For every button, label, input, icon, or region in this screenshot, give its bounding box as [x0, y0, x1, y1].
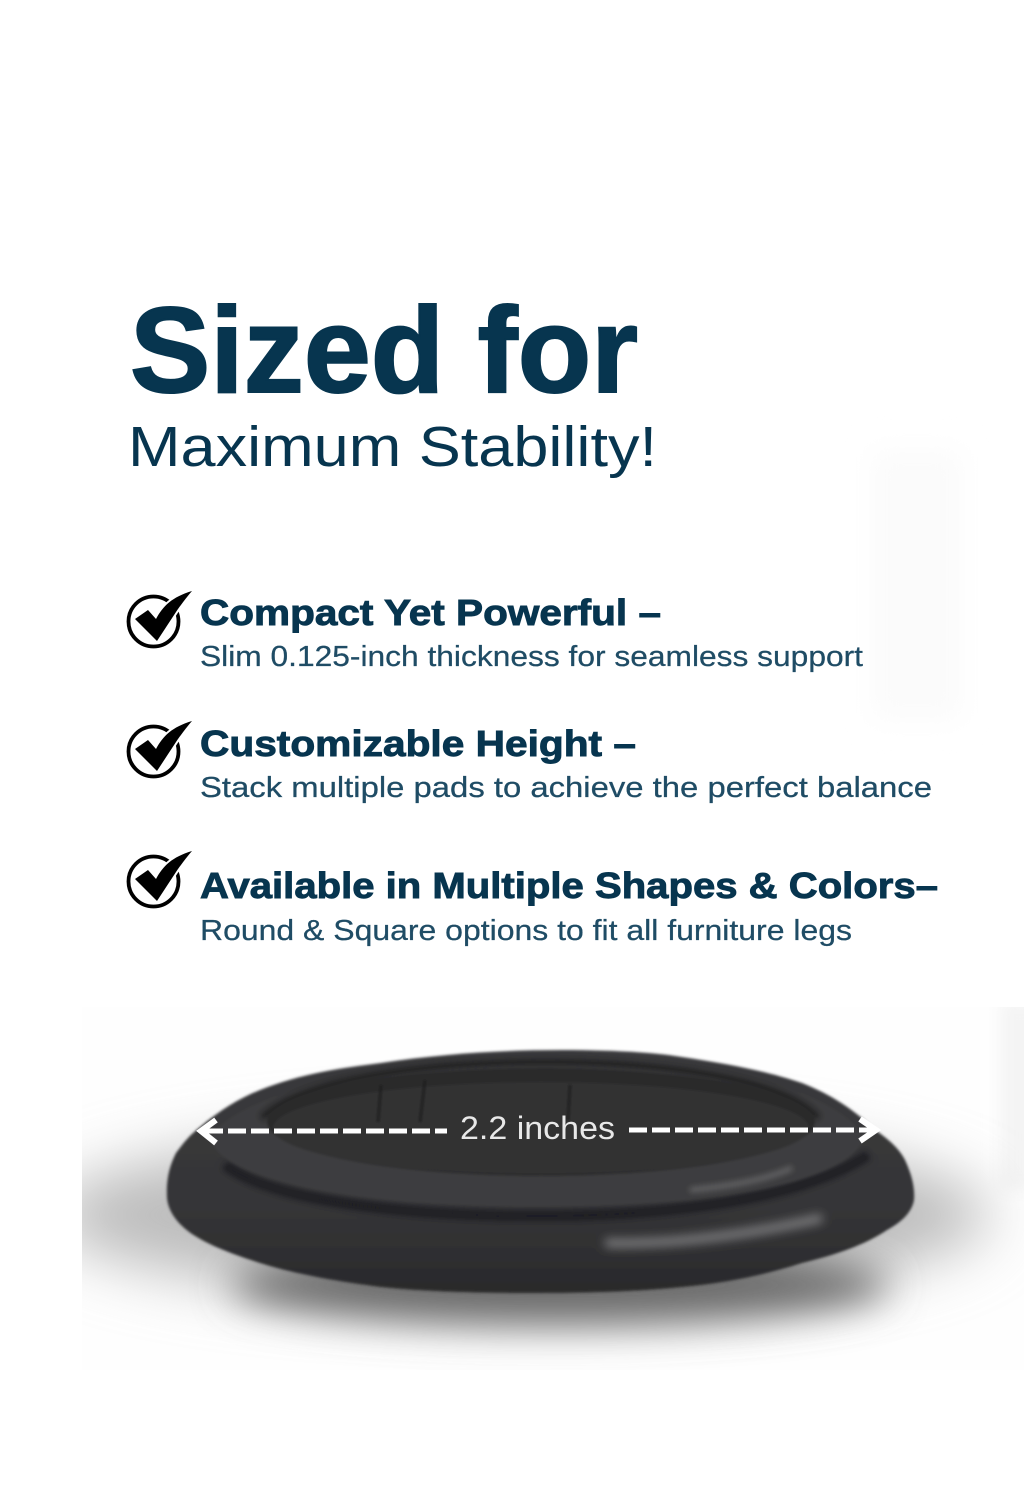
arrow: right dimension	[629, 1119, 876, 1141]
feature: shapes and colors	[128, 851, 938, 947]
arrow: left dimension	[201, 1120, 447, 1143]
feature: customizable height	[128, 721, 932, 804]
pad shadow	[50, 1000, 1024, 1370]
groove around ledge	[225, 1155, 868, 1216]
heading: customizable height: Customizable Height –	[200, 723, 636, 764]
icon: check mark 1	[128, 591, 192, 646]
recessed face	[267, 1068, 815, 1176]
subtitle: Maximum Stability!: Maximum Stability!	[128, 415, 657, 479]
background tint patch	[872, 450, 962, 720]
raised ledge	[227, 1154, 851, 1206]
pad body	[167, 1050, 914, 1293]
heading: compact yet powerful: Compact Yet Powerful –	[200, 592, 661, 633]
title: Sized for: Sized for	[130, 282, 638, 418]
feature: compact yet powerful	[128, 591, 863, 673]
text: stack multiple pads: Stack multiple pads to achieve the perfect balance	[200, 772, 932, 804]
heading: shapes and colors: Available in Multiple Shapes & Colors–	[200, 865, 938, 906]
text: slim thickness: Slim 0.125-inch thickness for seamless support	[200, 641, 863, 673]
product photo: furniture pad	[50, 1000, 1024, 1370]
text: round and square: Round & Square options to fit all furniture legs	[200, 915, 852, 947]
icon: check mark 2	[128, 721, 192, 776]
label: 2.2 inches: 2.2 inches	[460, 1110, 615, 1146]
icon: check mark 3	[128, 851, 192, 906]
